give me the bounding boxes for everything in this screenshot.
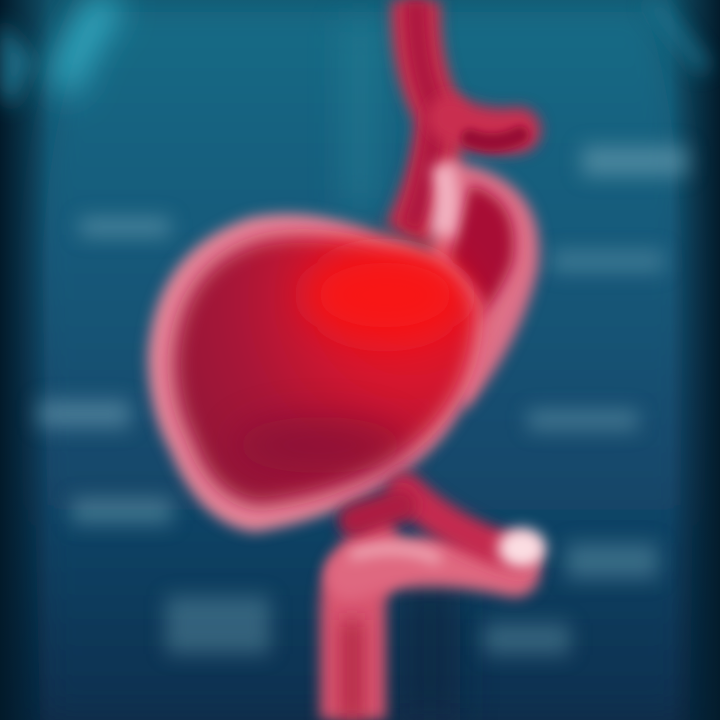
blurred labels [38, 146, 688, 655]
label: middle left [38, 400, 130, 428]
vessel tip highlight [498, 528, 546, 568]
label: lower right [528, 410, 638, 430]
label: middle right [552, 250, 664, 272]
right chamber [420, 160, 539, 410]
label: bottom right outer [566, 543, 658, 579]
label: upper left [80, 218, 170, 236]
label: lower left [72, 498, 172, 524]
lower vessels [350, 490, 546, 720]
heart highlight [305, 250, 465, 340]
label: bottom centre left [166, 596, 270, 654]
heart body [148, 214, 483, 532]
label: bottom centre right [484, 623, 570, 655]
branch [450, 118, 518, 131]
upper vessels [408, 0, 539, 410]
heart shadow [235, 417, 405, 473]
label: upper right [582, 146, 688, 176]
